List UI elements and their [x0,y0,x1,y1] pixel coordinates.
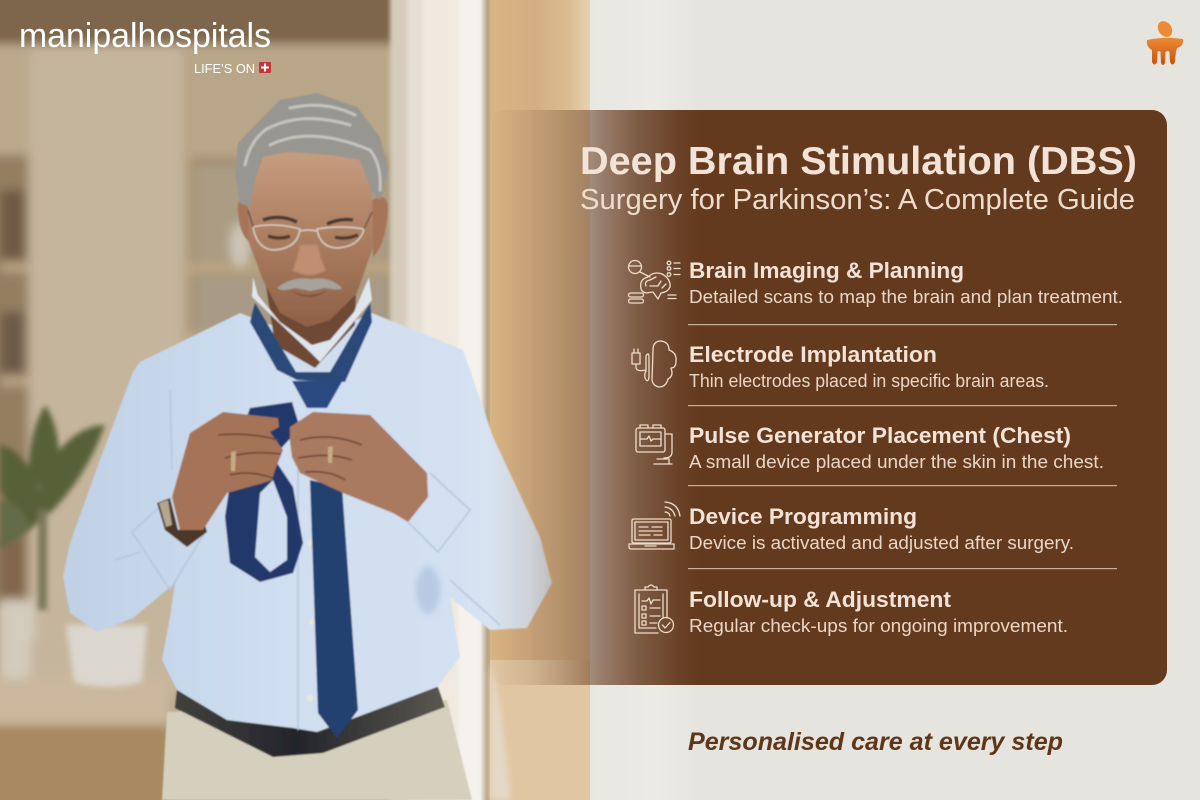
necktie loop [225,402,303,582]
step 3: pulse generator: A small device placed under the skin in the chest. [689,452,1104,472]
step 5: follow-up [635,585,1068,636]
left hand [172,412,283,530]
trousers [162,700,472,800]
title [580,140,1137,216]
step 1: brain imaging: Brain Imaging & Planning [689,258,964,283]
ears [238,197,388,257]
step 2: electrode implantation: Thin electrodes placed in specific brain areas. [689,371,1049,391]
pot [66,625,147,687]
shirt folds and cuffs [115,390,500,730]
logo: manipalhospitals: LIFE’S ON [194,62,255,76]
shirt body and arms [63,313,552,732]
step 3: pulse generator [636,423,1104,472]
step 1: brain imaging [628,258,1123,307]
icon: pulse monitor [636,425,672,464]
step 5: follow-up: Follow-up & Adjustment [689,587,952,612]
moustache [277,278,342,291]
tagline: Personalised care at every step [688,728,1063,756]
icon: laptop with wifi [629,502,680,549]
step 4: device programming [629,502,1074,553]
watch [157,498,207,547]
fingers [218,434,362,480]
hair [235,93,388,207]
title: Deep Brain Stimulation (DBS) [580,140,1137,183]
step 1: brain imaging: Detailed scans to map the brain and plan treatment. [689,287,1123,307]
tie band around collar [250,303,372,382]
plant [0,405,105,610]
necktie knot [292,380,343,408]
belt [175,685,445,757]
nose shadow [292,245,326,275]
icon: clipboard checklist [635,585,674,633]
glasses [248,210,372,250]
curtain and wood [390,0,482,800]
panel: DBS guide [490,110,1167,685]
man tying a necktie [63,93,552,800]
icon: orange corner logo [1147,18,1183,65]
step 5: follow-up: Regular check-ups for ongoing improvement. [689,616,1068,636]
step 4: device programming: Device is activated and adjusted after surgery. [689,533,1074,553]
collar [252,277,372,362]
step 3: pulse generator: Pulse Generator Placement (Chest) [689,423,1071,448]
eyebrows and eyes [263,217,353,224]
logo: manipalhospitals: manipalhospitals [19,17,271,55]
face [248,152,373,327]
step 2: electrode implantation [632,341,1049,391]
step 2: electrode implantation: Electrode Implantation [689,342,937,367]
logo: manipalhospitals [19,17,271,76]
necktie blade [310,480,358,738]
icon: electrode and brain [632,341,676,387]
right hand [290,412,428,522]
neck [266,285,356,368]
step 4: device programming: Device Programming [689,504,917,529]
icon: brain scan [628,260,680,303]
title: Surgery for Parkinson’s: A Complete Guide [580,184,1135,216]
